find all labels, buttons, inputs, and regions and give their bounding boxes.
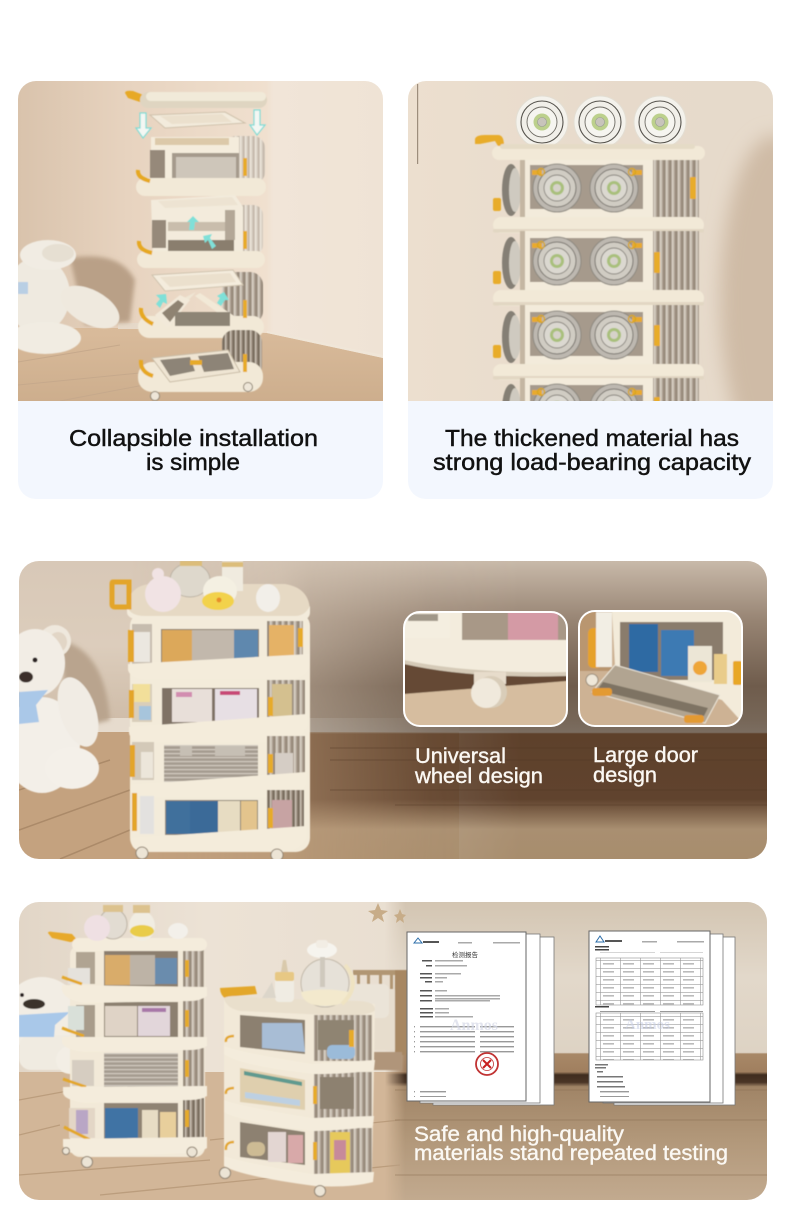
conclusion notes bbox=[595, 1064, 625, 1088]
watermark: Anmos bbox=[450, 1017, 498, 1034]
arrow: open right bbox=[217, 292, 229, 306]
panel: universal wheel and large door bbox=[4, 561, 767, 861]
report header bbox=[414, 938, 520, 959]
report fields bbox=[420, 960, 500, 1018]
test report stack 2 bbox=[589, 931, 735, 1105]
test report stack 1 bbox=[407, 932, 554, 1105]
cart left: four tiers bbox=[48, 905, 207, 1168]
top tray bbox=[127, 584, 310, 620]
arrow: down right bbox=[250, 110, 265, 135]
tray 3 bbox=[130, 772, 306, 797]
watermark: Anmos bbox=[625, 1017, 670, 1033]
label: large door: design bbox=[593, 763, 657, 787]
wheels bbox=[62, 1147, 197, 1168]
windows bbox=[104, 951, 178, 1141]
cart: four tiers bbox=[112, 561, 310, 861]
yellow side rails bbox=[62, 977, 90, 1140]
caption heading: is simple bbox=[146, 449, 240, 475]
panel: safe materials and testing bbox=[4, 902, 767, 1200]
scene: room background bbox=[19, 561, 767, 859]
teddy bear with bow bbox=[19, 624, 112, 794]
top items bbox=[84, 905, 188, 941]
arrow: open left bbox=[156, 294, 167, 308]
bed bbox=[347, 970, 410, 1070]
caption background bbox=[408, 401, 773, 499]
body bbox=[224, 1000, 375, 1186]
body bbox=[70, 945, 205, 1157]
inset: wheel bbox=[404, 612, 567, 726]
arrow: fold up 1 bbox=[187, 216, 199, 230]
side compartments bbox=[68, 952, 95, 1138]
caption heading: Collapsible installation bbox=[69, 425, 318, 451]
tray 2 bbox=[129, 714, 307, 742]
tier 1 bbox=[493, 158, 704, 233]
report header bbox=[595, 936, 704, 956]
handle bbox=[220, 986, 257, 999]
frame bbox=[150, 112, 245, 128]
trays bbox=[62, 938, 207, 1157]
yellow latches bbox=[654, 177, 696, 407]
panel: thickened material bbox=[408, 81, 790, 499]
handle and top tray bbox=[475, 135, 705, 160]
yellow side rails bbox=[226, 1036, 234, 1150]
tier 1 contents bbox=[128, 621, 303, 668]
report header: 检 测 报 告 bbox=[452, 950, 478, 959]
tier 2 bbox=[137, 195, 265, 268]
tier 1 bbox=[136, 136, 266, 196]
tier 3 bbox=[138, 270, 264, 338]
caption heading: The thickened material has bbox=[445, 425, 739, 451]
caption background bbox=[18, 401, 383, 499]
label: universal wheel: Universal bbox=[415, 744, 506, 768]
tier 4 contents bbox=[132, 790, 304, 838]
red stamp bbox=[476, 1053, 498, 1075]
table 2 bbox=[596, 1013, 703, 1060]
plates on top bbox=[516, 96, 686, 148]
label: large door: Large door bbox=[593, 743, 698, 767]
teddy bear bbox=[6, 240, 135, 354]
arrow: fold up 2 bbox=[203, 234, 216, 249]
clear side strips bbox=[183, 946, 204, 1140]
top items bbox=[145, 561, 280, 612]
scene: wall and shadow bbox=[408, 81, 773, 401]
body bbox=[130, 612, 310, 852]
label: safe materials heading: materials stand repeated testing bbox=[414, 1141, 728, 1165]
table 1 bbox=[596, 958, 703, 1005]
cart right: three tiers bbox=[220, 940, 375, 1196]
stars decoration bbox=[368, 903, 406, 923]
report notes bbox=[414, 1025, 514, 1053]
handle bbox=[112, 582, 129, 607]
windows bbox=[240, 1015, 305, 1165]
caption heading: strong load-bearing capacity bbox=[433, 449, 752, 475]
bottom tray bbox=[132, 826, 306, 852]
scene: room background bbox=[19, 902, 767, 1200]
panel: collapsible installation bbox=[6, 81, 383, 499]
tray 1 bbox=[128, 654, 304, 674]
tier 2 contents bbox=[129, 680, 305, 730]
arrow: down left bbox=[136, 113, 151, 138]
top tray surface bbox=[224, 996, 375, 1016]
tier 3 contents bbox=[130, 736, 305, 784]
clear sides bbox=[313, 1015, 372, 1175]
cart with pots bbox=[474, 134, 705, 401]
report footer bbox=[414, 1090, 446, 1097]
tier 4 bbox=[502, 378, 700, 401]
top items bbox=[262, 940, 353, 1007]
teddy bear bbox=[4, 977, 91, 1074]
table 1 heading bbox=[595, 1006, 703, 1012]
top tray and handle bbox=[125, 91, 267, 108]
tier 3 bbox=[493, 305, 704, 380]
report footer bbox=[597, 1090, 629, 1097]
exploded cart bbox=[125, 91, 267, 400]
label: safe materials heading: Safe and high-quality bbox=[414, 1122, 624, 1146]
scene: wall and floor bbox=[18, 81, 383, 401]
inset: large door bbox=[579, 611, 742, 726]
tier 2 bbox=[493, 231, 704, 306]
trays bbox=[224, 1046, 375, 1186]
label: universal wheel: wheel design bbox=[414, 764, 543, 788]
handle bbox=[48, 932, 78, 942]
wheels bbox=[136, 847, 283, 861]
wheels bbox=[220, 1168, 326, 1196]
tier 4 bbox=[138, 330, 263, 400]
